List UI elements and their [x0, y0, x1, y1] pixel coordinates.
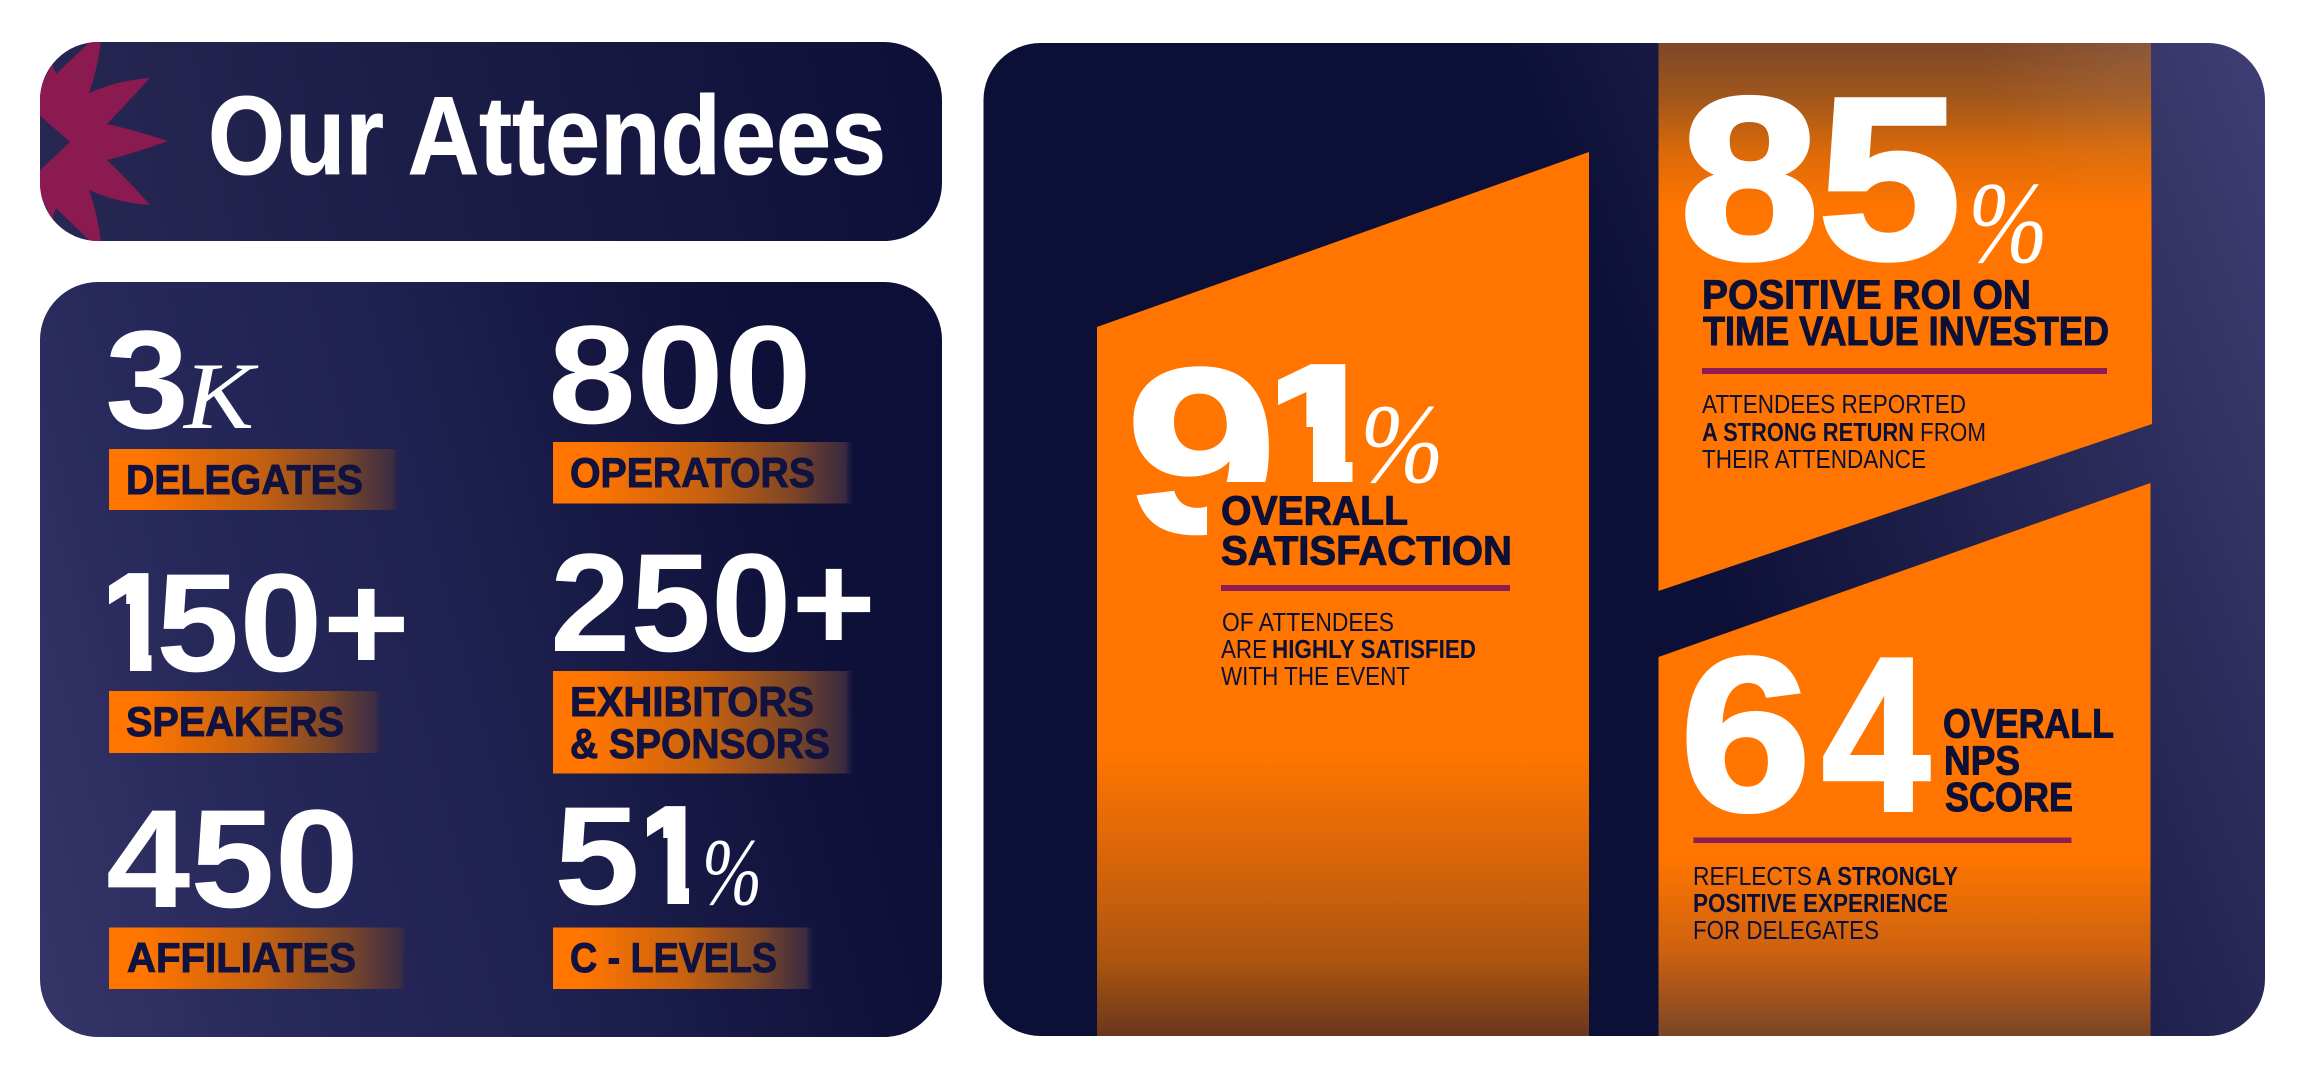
- stat: 450 affiliates: AFFILIATES: [127, 934, 356, 981]
- number: 64: 4: [1822, 613, 1930, 857]
- text: NPS description: POSITIVE EXPERIENCE: [1693, 888, 1948, 918]
- number: 91 percent: [1133, 364, 1438, 536]
- stat: 51% c-levels: 1: [632, 777, 710, 934]
- stat: 250+ exhibitors and sponsors: EXHIBITORS: [570, 678, 814, 725]
- stat: 150+ speakers: [109, 573, 404, 753]
- title: Our Attendees: [208, 74, 886, 198]
- text: ROI description: THEIR ATTENDANCE: [1702, 444, 1926, 474]
- text: NPS description: REFLECTS: [1693, 861, 1812, 891]
- number: 85 percent: %: [1968, 159, 2048, 288]
- number: 64: 6: [1680, 613, 1811, 857]
- text: NPS description: FOR DELEGATES: [1693, 915, 1879, 945]
- panel: attendee stats: [40, 282, 942, 1037]
- stat: 150+ speakers: 50+: [156, 544, 410, 701]
- stat: 150+ speakers: SPEAKERS: [126, 698, 344, 745]
- number: 85 percent: 8: [1680, 50, 1819, 307]
- stat: 250+ exhibitors and sponsors: [550, 524, 876, 774]
- stat: 3K delegates: K: [182, 343, 259, 449]
- heading: overall NPS score: SCORE: [1945, 774, 2073, 820]
- text: satisfaction description: HIGHLY SATISFIED: [1272, 634, 1476, 664]
- text: NPS description: [1693, 861, 1958, 945]
- stat: 800 operators: 800: [548, 296, 812, 453]
- stat: 51% c-levels: C - LEVELS: [570, 934, 777, 981]
- heading: positive ROI on time value invested: TIME VALUE INVESTED: [1703, 308, 2109, 354]
- panel: positive ROI: [1658, 43, 2152, 591]
- stat: 800 operators: OPERATORS: [570, 449, 815, 496]
- stat: 450 affiliates: [106, 780, 409, 989]
- stat: 250+ exhibitors and sponsors: & SPONSORS: [570, 720, 830, 767]
- stat: 3K delegates: [105, 301, 401, 510]
- stat: 250+ exhibitors and sponsors: 250+: [550, 524, 876, 681]
- heading: overall NPS score: OVERALL: [1943, 700, 2114, 746]
- number: 91 percent: 1: [1258, 332, 1383, 518]
- panel: overall satisfaction: [1097, 152, 1589, 1036]
- panel: survey results background: [984, 43, 2265, 1036]
- stat: 800 operators: [548, 296, 854, 504]
- stat: 51% c-levels: [553, 806, 812, 989]
- stat: 3K delegates: 3: [105, 301, 189, 458]
- panel: NPS score: [1658, 483, 2150, 1036]
- number: 85 percent: [1680, 50, 2048, 307]
- text: ROI description: FROM: [1920, 417, 1986, 447]
- heading: overall satisfaction: OVERALL: [1221, 488, 1408, 534]
- stat: 150+ speakers: 1: [95, 544, 173, 701]
- number: 91 percent: %: [1360, 382, 1444, 507]
- heading: overall NPS score: [1943, 700, 2114, 820]
- heading: overall satisfaction: SATISFACTION: [1221, 528, 1512, 574]
- heading: positive ROI on time value invested: [1702, 272, 2109, 354]
- text: satisfaction description: OF ATTENDEES: [1222, 607, 1394, 637]
- text: satisfaction description: WITH THE EVENT: [1221, 661, 1410, 691]
- stat: 51% c-levels: %: [702, 819, 762, 925]
- text: ROI description: A STRONG RETURN: [1702, 417, 1914, 447]
- text: satisfaction description: [1221, 607, 1476, 691]
- text: ROI description: ATTENDEES REPORTED: [1702, 389, 1966, 419]
- panel: title banner: [38, 40, 942, 243]
- text: satisfaction description: ARE: [1221, 634, 1267, 664]
- stat: 450 affiliates: 450: [106, 780, 359, 937]
- heading: positive ROI on time value invested: POSITIVE ROI ON: [1702, 272, 2031, 318]
- stat: 3K delegates: DELEGATES: [126, 456, 363, 503]
- number: 85 percent: 5: [1818, 50, 1961, 307]
- number: 64: [1680, 613, 1930, 857]
- text: NPS description: A STRONGLY: [1816, 861, 1958, 891]
- icon: crimson star: [38, 40, 168, 243]
- heading: overall NPS score: NPS: [1944, 738, 2020, 784]
- heading: overall satisfaction: [1221, 488, 1512, 574]
- number: 91 percent: 9: [1125, 319, 1278, 583]
- text: ROI description: [1702, 389, 1986, 474]
- stat: 51% c-levels: 5: [554, 777, 640, 934]
